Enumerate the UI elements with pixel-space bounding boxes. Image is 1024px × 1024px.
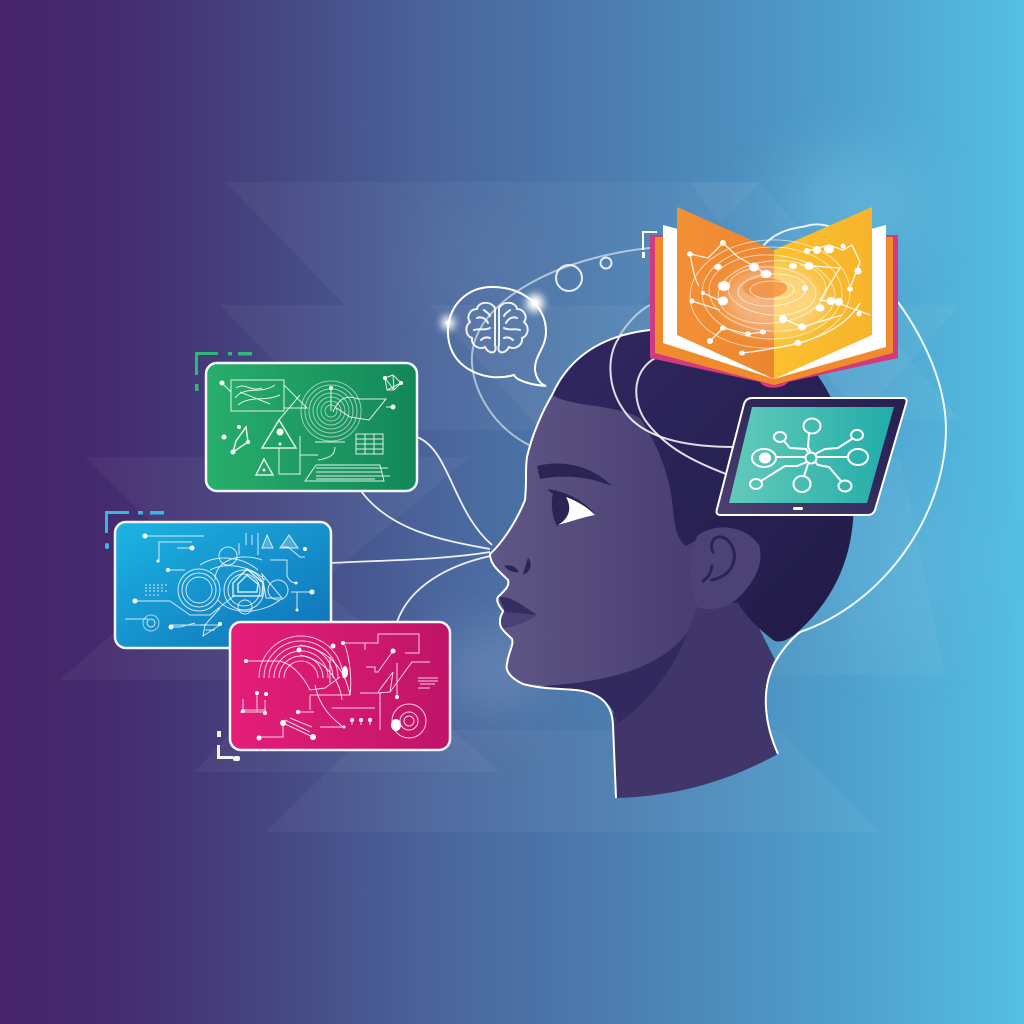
eye [547,489,595,526]
background geometric triangles [60,182,960,832]
swirl contours [687,236,853,352]
icon: brain [466,303,528,352]
node network [750,418,868,492]
book cover [650,235,898,388]
face [490,395,700,686]
panel: pink card [230,622,450,750]
home button [793,507,803,510]
bracket: pink card [217,731,240,761]
head outline [490,330,800,798]
bracket: blue card [105,511,164,549]
hair [552,329,854,642]
lips [499,597,537,628]
constellation nodes [687,240,862,356]
connector lines from cards to nose [331,437,492,622]
open book [650,207,898,388]
small thought bubbles [556,258,612,291]
book bracket [642,232,657,258]
neck [613,600,778,798]
soft background glows [425,155,960,710]
diagram lines [240,634,438,738]
bracket: green card [195,352,252,391]
panel: green card [206,363,417,491]
diagram lines [125,533,312,636]
swirl glow [725,266,825,334]
head [490,329,854,798]
eyebrow [537,463,612,486]
ear inner [703,537,734,581]
hair flow lines [610,334,735,474]
large thought swoosh lines behind head [472,224,850,445]
swirl core [743,278,787,298]
left page [677,207,774,379]
diagram lines [222,375,401,481]
sparkle glows [441,294,544,330]
panel: blue card [115,522,331,648]
right page [774,207,872,379]
right outer swoosh [800,302,946,632]
speech bubble with brain icon [441,287,546,386]
white pages [663,225,886,379]
constellation lines [690,243,870,353]
tablet screen [729,407,894,503]
tablet [716,398,907,515]
jaw shadow [540,632,688,723]
ear [691,527,761,609]
inner cover [655,237,893,385]
tablet body [716,398,907,515]
nose detail [505,558,530,574]
